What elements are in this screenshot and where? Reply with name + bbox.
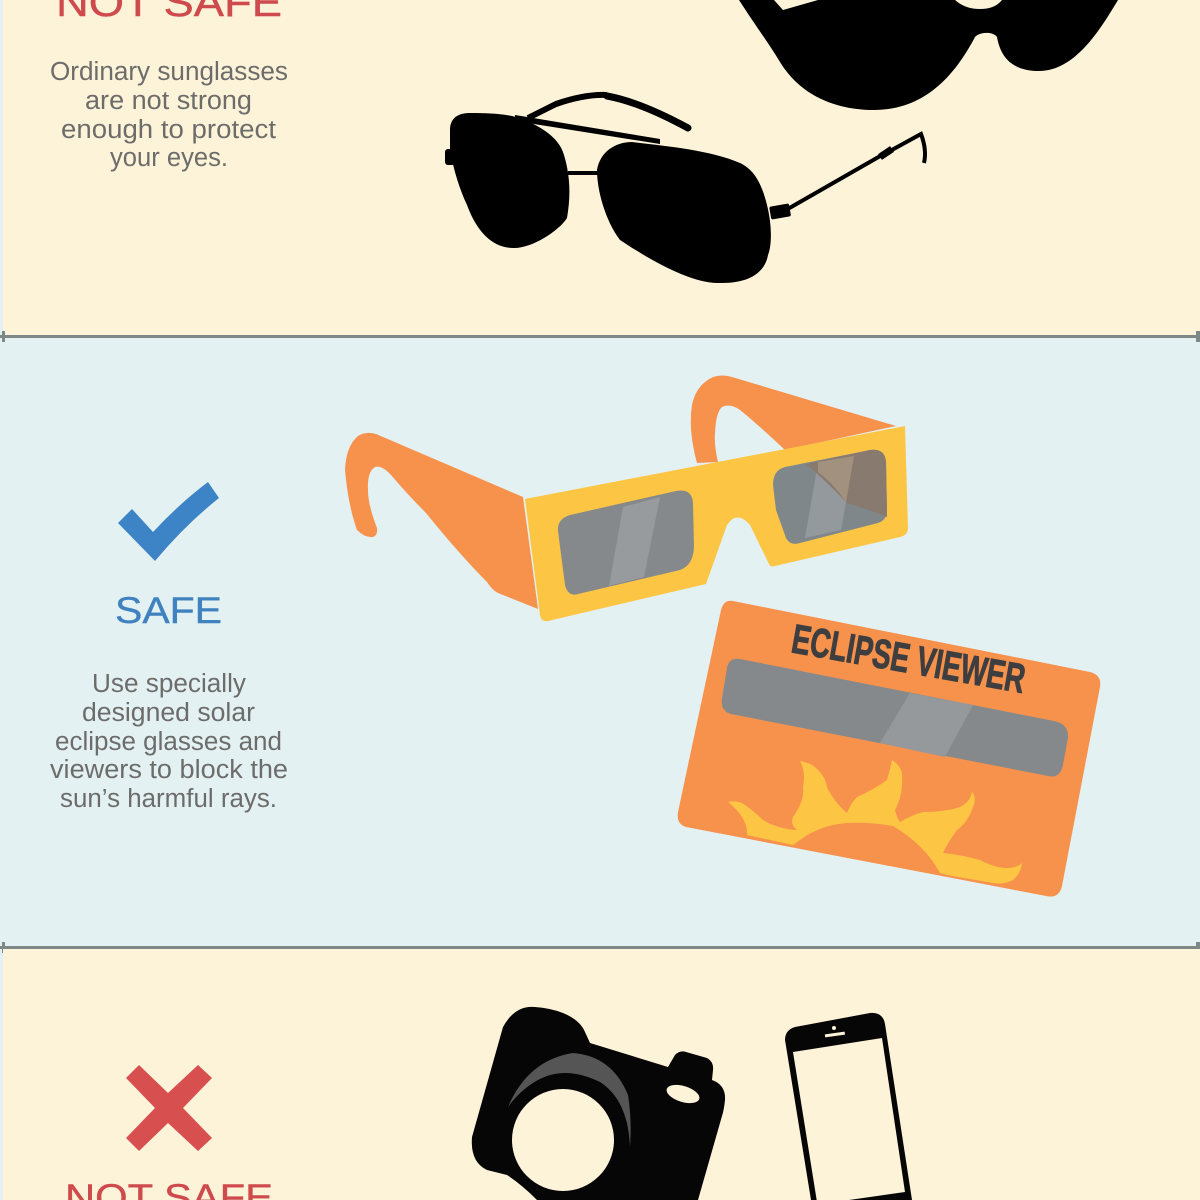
divider: lower <box>0 942 1200 953</box>
icon: check mark <box>118 482 219 561</box>
far arm <box>691 376 896 463</box>
text block: ordinary sunglasses: enough to protect <box>61 116 276 144</box>
text block: use solar glasses <box>50 670 288 813</box>
icon: eclipse viewer card <box>678 601 1100 897</box>
left lens <box>558 490 694 595</box>
panel: cameras and phones not safe <box>3 949 1200 1200</box>
icon: large sunglasses, cropped at top <box>739 0 1118 110</box>
text block: ordinary sunglasses: are not strong <box>85 87 252 115</box>
right lens with reflection <box>773 450 887 544</box>
text block: use solar glasses: Use specially <box>92 670 246 698</box>
viewer label: ECLIPSE VIEWER <box>788 616 1029 702</box>
frame <box>525 426 908 621</box>
near arm <box>345 433 538 609</box>
text block: use solar glasses: designed solar <box>82 699 256 727</box>
sun graphic <box>728 760 1022 884</box>
icon: smartphone <box>785 1013 912 1200</box>
viewer window <box>722 659 1068 777</box>
card <box>678 601 1100 897</box>
text block: ordinary sunglasses <box>50 58 288 172</box>
heading: safe: SAFE <box>115 590 222 631</box>
icon: camera <box>472 1007 725 1200</box>
panel: safe viewing <box>50 376 1100 897</box>
divider: upper <box>0 331 1200 342</box>
icon: aviator sunglasses <box>445 95 925 283</box>
text block: use solar glasses: eclipse glasses and <box>55 728 282 756</box>
text block: use solar glasses: viewers to block the <box>50 756 288 784</box>
panel: sunglasses not safe <box>3 0 1200 335</box>
text block: use solar glasses: sun’s harmful rays. <box>60 785 277 813</box>
text block: ordinary sunglasses: Ordinary sunglasses <box>50 58 288 86</box>
icon: x mark <box>126 1065 212 1151</box>
text block: ordinary sunglasses: your eyes. <box>110 144 228 172</box>
icon: solar eclipse glasses <box>345 376 908 621</box>
